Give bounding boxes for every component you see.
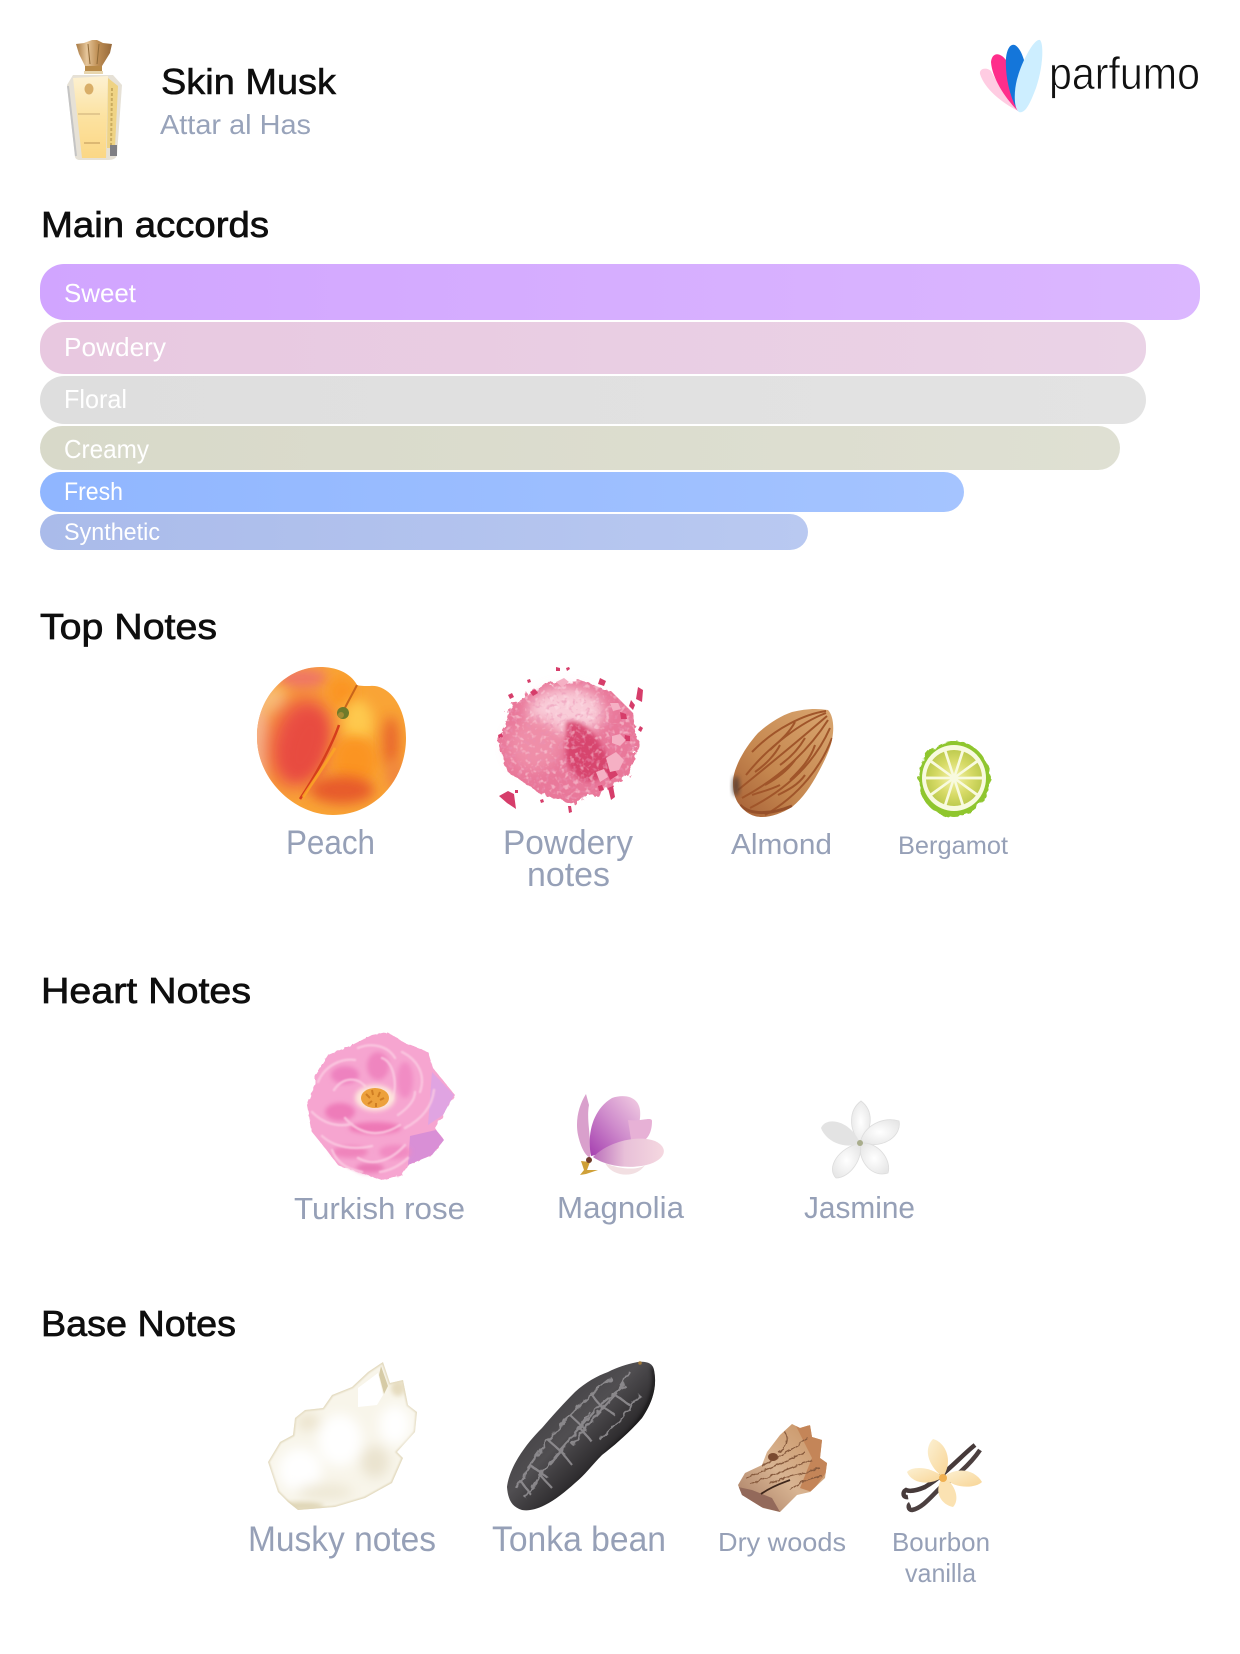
- note: peach: [256, 667, 406, 854]
- heading: main accords: Main accords: [41, 204, 269, 245]
- heading: top notes: Top Notes: [40, 606, 217, 647]
- logo: parfumo: [980, 40, 1200, 112]
- note: bourbon vanilla: [892, 1439, 990, 1588]
- title: Skin Musk: [161, 61, 337, 102]
- note: bergamot: [898, 741, 1008, 860]
- note: powdery notes: [498, 667, 643, 894]
- label: bourbon vanilla: [892, 1527, 990, 1588]
- note: dry woods: [718, 1424, 846, 1557]
- header: [67, 40, 1200, 160]
- label: jasmine: Jasmine: [804, 1190, 915, 1225]
- bar: floral: Floral: [64, 384, 127, 414]
- note: jasmine: [804, 1101, 915, 1225]
- label: almond: Almond: [731, 829, 832, 861]
- label: powdery notes: Powdery: [503, 824, 633, 862]
- label: tonka bean: Tonka bean: [492, 1520, 666, 1559]
- label: magnolia: Magnolia: [557, 1190, 685, 1225]
- bar: powdery: [40, 322, 1146, 374]
- note: turkish rose: [294, 1032, 465, 1226]
- label: turkish rose: Turkish rose: [294, 1191, 465, 1226]
- panel: heart notes: [294, 1032, 915, 1226]
- logo: parfumo: parfumo: [1049, 48, 1200, 99]
- icon: perfume bottle: [67, 40, 122, 160]
- heading: base notes: Base Notes: [41, 1303, 236, 1344]
- panel: base notes: [248, 1361, 990, 1588]
- label: musky notes: Musky notes: [248, 1520, 436, 1559]
- brand name: Attar al Has: [160, 109, 311, 140]
- label: dry woods: Dry woods: [718, 1527, 846, 1557]
- bar: creamy: [40, 426, 1120, 470]
- panel: accord bars: [40, 264, 1200, 550]
- bar: fresh: [40, 472, 964, 512]
- label: peach: Peach: [286, 824, 375, 862]
- bar: sweet: [40, 264, 1200, 320]
- heading: heart notes: Heart Notes: [41, 970, 251, 1011]
- label: bourbon vanilla: Bourbon: [892, 1527, 990, 1557]
- panel: top notes: [246, 667, 1008, 894]
- bar: synthetic: Synthetic: [64, 519, 160, 546]
- bar: synthetic: [40, 514, 808, 550]
- label: bourbon vanilla: vanilla: [905, 1558, 977, 1588]
- bar: creamy: Creamy: [64, 434, 149, 464]
- bar: sweet: Sweet: [64, 278, 137, 308]
- bar: floral: [40, 376, 1146, 424]
- bar: fresh: Fresh: [64, 478, 123, 506]
- label: powdery notes: notes: [527, 856, 610, 894]
- label: bergamot: Bergamot: [898, 832, 1008, 860]
- bar: powdery: Powdery: [64, 332, 166, 362]
- note: magnolia: [557, 1094, 685, 1225]
- label: powdery notes: [503, 824, 633, 894]
- note: tonka bean: [492, 1361, 670, 1559]
- note: musky notes: [248, 1362, 436, 1559]
- note: almond: [731, 709, 833, 861]
